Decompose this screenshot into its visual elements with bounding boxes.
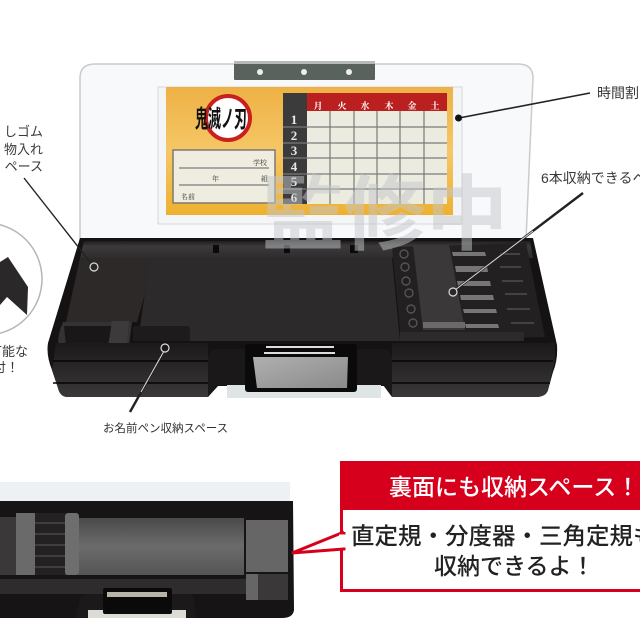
timetable card [158,87,462,224]
timetable grid: 6 [291,190,298,205]
magnified detail circle [0,223,42,335]
back clasp [76,588,196,618]
timetable grid: 水 [360,100,370,111]
logo: 鬼滅の刃: 鬼滅ノ刃 [195,106,247,133]
front clasp [208,344,392,398]
label: ペース [5,159,43,174]
callout: timetable [455,85,639,122]
name box: 学校 [253,158,268,167]
back rack [16,513,79,575]
name box [173,150,275,203]
timetable grid: 4 [291,159,298,174]
name box: 年 [212,174,219,183]
back side compartment [246,520,288,600]
timetable grid: 木 [384,100,394,111]
timetable grid [283,93,447,205]
back wall [80,241,533,258]
watermark: 監修中 [262,170,508,261]
back view photo [0,482,294,618]
callout: name pen storage: お名前ペン収納スペース [103,421,228,435]
callout: back storage: 裏面にも収納スペース！ [389,474,639,500]
six-pen rack [392,243,545,341]
label: しゴム [4,124,43,139]
timetable grid: 月 [313,101,323,111]
lid hinge plate [234,61,375,80]
callout: back storage [292,461,640,590]
front wall [52,343,555,397]
timetable grid: 5 [291,174,298,189]
back case body [0,501,294,618]
compartment floor left [58,258,155,353]
name box: 組 [261,175,268,183]
callout: back storage: 収納できるよ！ [434,553,595,579]
timetable grid: 2 [291,128,297,143]
opened clear lid [80,61,533,240]
label: 物入れ [4,142,43,157]
logo: 鬼滅の刃 [195,96,250,140]
lid edge [0,482,290,502]
name pen compartment and central tray [133,258,400,341]
callout: six pen storage [449,170,640,296]
label [4,124,43,174]
name box: 名前 [181,192,195,201]
timetable grid: 火 [337,101,347,111]
timetable grid: 1 [291,112,297,127]
pointer opening [339,534,346,548]
callout: attached note [0,344,28,375]
callout: rubber band storage [4,124,98,271]
callout header [340,461,640,510]
callout: name pen storage [103,344,228,435]
callout pointer [292,532,344,553]
pencase body [48,238,557,397]
callout box [342,462,640,590]
callout: timetable: 時間割 [597,85,639,101]
timetable grid: 土 [430,100,440,111]
timetable grid: 金 [407,100,417,111]
timetable grid: 3 [291,143,298,158]
